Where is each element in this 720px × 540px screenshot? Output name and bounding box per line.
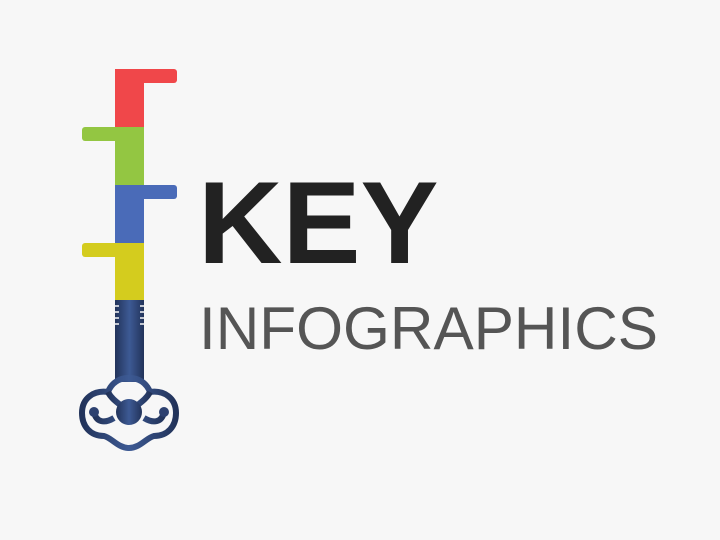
key shaft and bow bbox=[82, 300, 176, 448]
key segment: red bbox=[115, 69, 177, 127]
key segment: blue bbox=[115, 185, 177, 243]
title: KEY: KEY bbox=[198, 157, 439, 288]
key segment: yellow bbox=[82, 243, 144, 300]
subtitle: INFOGRAPHICS: INFOGRAPHICS bbox=[199, 294, 658, 362]
key segment: green bbox=[82, 127, 144, 185]
